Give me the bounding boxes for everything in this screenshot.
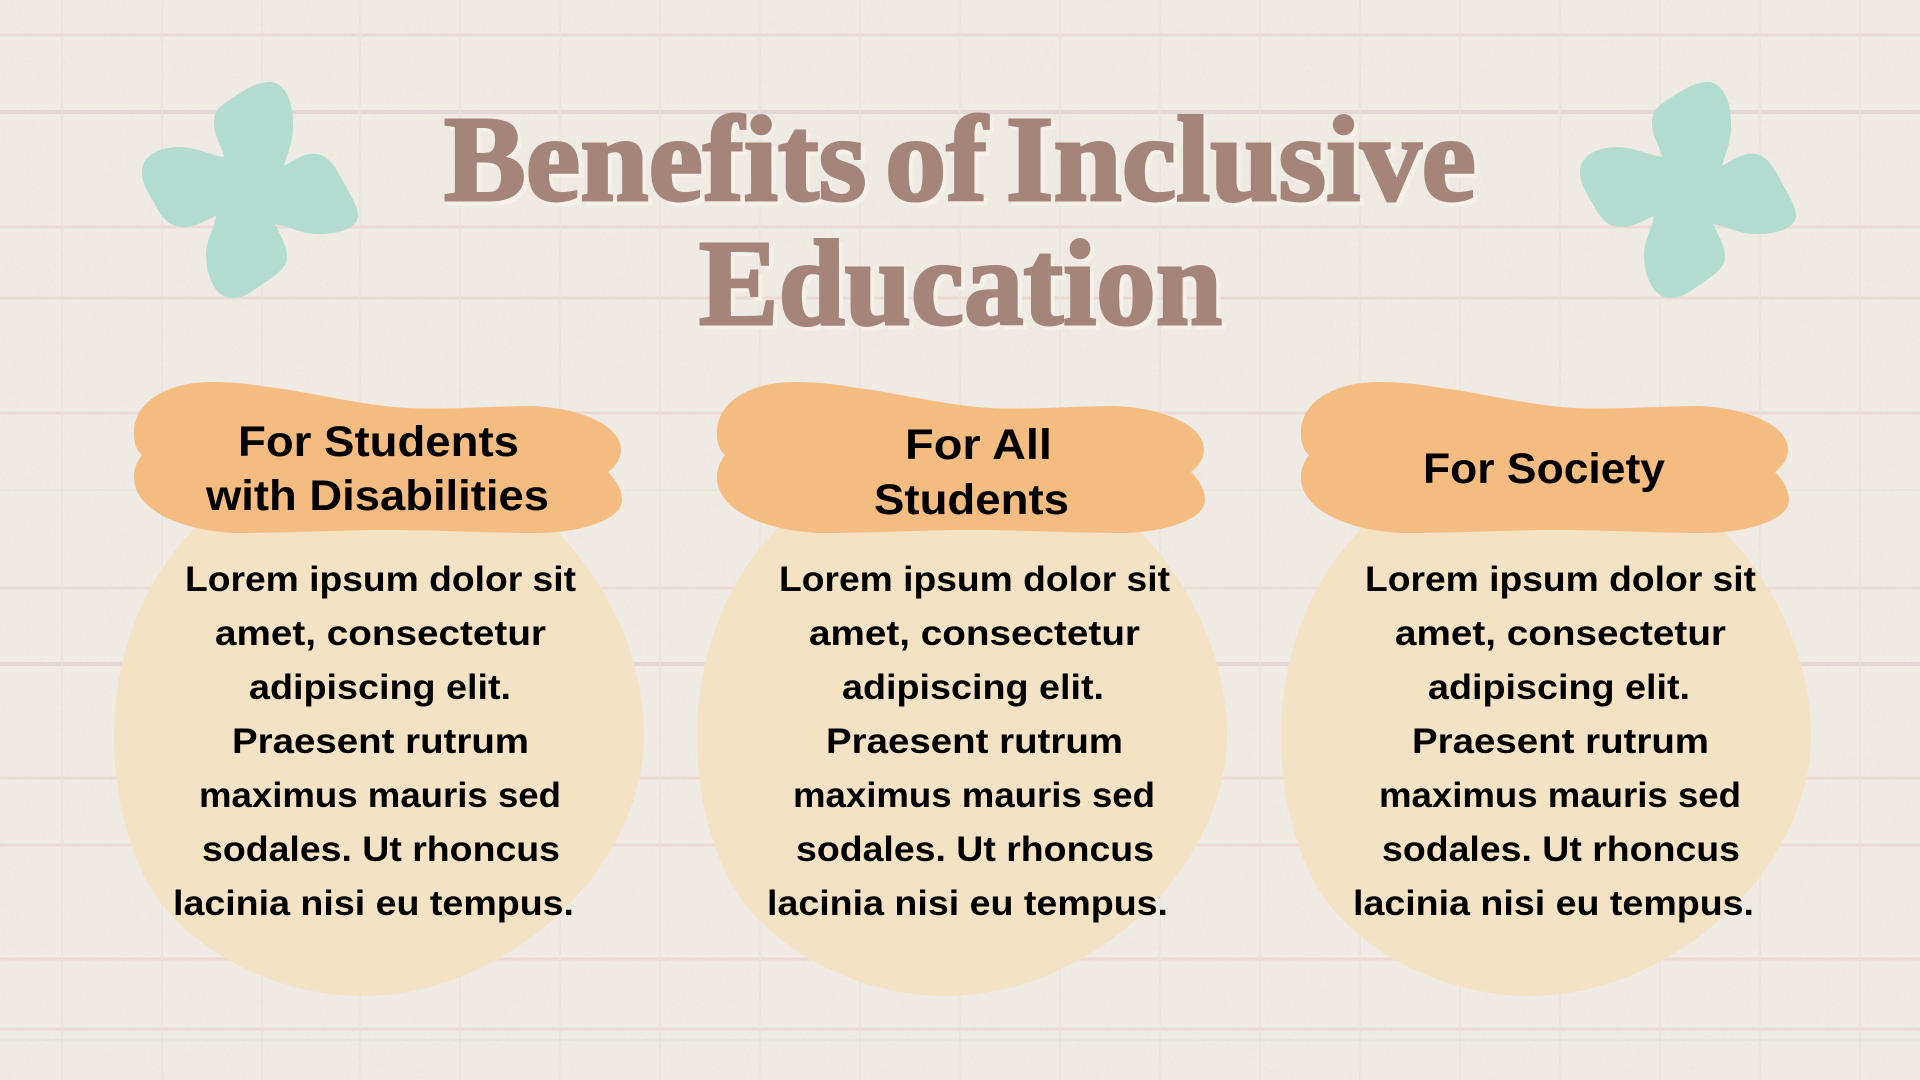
body text: lacinia nisi eu tempus.: [767, 884, 1168, 923]
heading: with Disabilities: [205, 472, 549, 520]
body text: [1353, 560, 1756, 923]
body text: maximus mauris sed: [793, 776, 1155, 815]
body text: Lorem ipsum dolor sit: [779, 560, 1170, 599]
body text: adipiscing elit.: [1428, 668, 1690, 707]
panel: for society: [1281, 382, 1811, 996]
body text: maximus mauris sed: [199, 776, 561, 815]
body text: amet, consectetur: [1395, 614, 1726, 653]
icon: left flower: [142, 82, 358, 298]
panel background circle: [697, 455, 1227, 996]
body text: lacinia nisi eu tempus.: [173, 884, 574, 923]
heading blob: [134, 382, 622, 533]
title: Education: [703, 220, 1226, 355]
body text: adipiscing elit.: [842, 668, 1104, 707]
heading: For Society: [1423, 445, 1665, 493]
body text: sodales. Ut rhoncus: [796, 830, 1154, 869]
panel: for students with disabilities: [114, 382, 644, 996]
body text: amet, consectetur: [215, 614, 546, 653]
heading blob: [717, 382, 1205, 533]
panel background circle: [114, 455, 644, 996]
heading: [205, 418, 549, 520]
title: Education: [699, 216, 1222, 351]
heading: For Students: [238, 418, 519, 466]
body text: maximus mauris sed: [1379, 776, 1741, 815]
body text: lacinia nisi eu tempus.: [1353, 884, 1754, 923]
body text: adipiscing elit.: [249, 668, 511, 707]
heading blob: [1301, 382, 1789, 533]
title: Benefits of Inclusive: [448, 96, 1480, 231]
body text: Lorem ipsum dolor sit: [1365, 560, 1756, 599]
body text: Lorem ipsum dolor sit: [185, 560, 576, 599]
body text: Praesent rutrum: [826, 722, 1123, 761]
icon: right flower: [1580, 82, 1796, 298]
body text: amet, consectetur: [809, 614, 1140, 653]
body text: [173, 560, 576, 923]
panel: for all students: [697, 382, 1227, 996]
body text: Praesent rutrum: [1412, 722, 1709, 761]
heading: Students: [874, 476, 1069, 524]
body text: sodales. Ut rhoncus: [202, 830, 560, 869]
heading: [874, 421, 1069, 524]
title: Benefits of Inclusive: [444, 92, 1476, 227]
body text: [767, 560, 1170, 923]
body text: sodales. Ut rhoncus: [1382, 830, 1740, 869]
heading: For All: [905, 421, 1052, 469]
title: [444, 92, 1480, 355]
panel background circle: [1281, 455, 1811, 996]
body text: Praesent rutrum: [232, 722, 529, 761]
